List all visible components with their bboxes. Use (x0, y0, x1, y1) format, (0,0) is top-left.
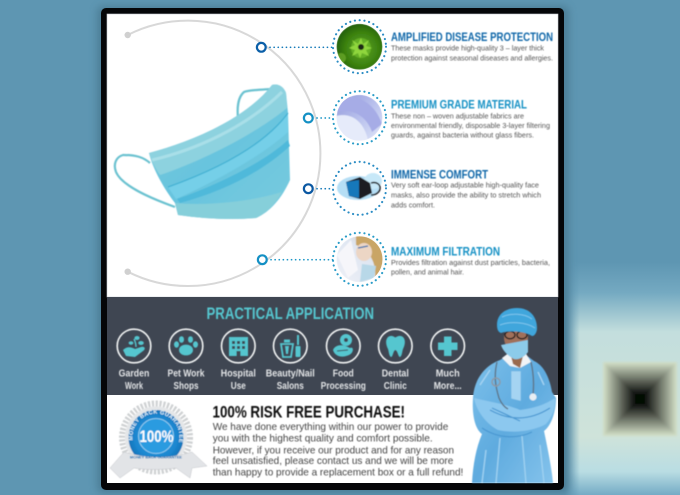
feature heading: premium grade material: PREMIUM GRADE MATERIAL (391, 97, 527, 111)
top white panel (107, 14, 558, 297)
feature icon: laboratory worker (333, 233, 386, 286)
left ear loop (115, 155, 175, 207)
bottom white panel (107, 395, 558, 483)
node: disease protection (257, 43, 333, 52)
guarantee text: We have done everything within our power to provide (213, 422, 449, 433)
feature text: immense comfort (391, 183, 541, 209)
application: pet work shops (168, 329, 205, 392)
guarantee text: than happy to provide a replacement box or a full refund! (213, 467, 463, 478)
feature text: amplified disease protection: These masks provide high-quality 3 – layer thick (391, 46, 545, 53)
application: garden work: Garden (119, 368, 149, 380)
feature icon: comfort mask (333, 162, 386, 215)
feature text: immense comfort: masks, also provide the ability to stretch which (391, 193, 541, 200)
card frame (101, 8, 564, 490)
stethoscope (495, 362, 534, 409)
feature text: premium grade material: guards, against bacteria without glass fibers. (391, 133, 534, 140)
application: garden work (117, 329, 151, 392)
guarantee text: feel unsatisfied, please contact us and we will be more (213, 456, 454, 467)
badge arc text: MONEY BACK GUARANTEE (128, 410, 184, 443)
heading: practical application: PRACTICAL APPLICATION (206, 304, 374, 323)
glasses (505, 331, 527, 339)
pleat one (168, 113, 288, 199)
feature text: amplified disease protection: protection against seasonal diseases and allergies. (391, 56, 553, 63)
application: hospital use: Use (231, 380, 246, 392)
application: dental clinic: Clinic (384, 380, 407, 392)
application: hospital use (221, 329, 256, 392)
feature icon: virus (333, 20, 386, 73)
mask body (149, 84, 290, 219)
face (504, 325, 528, 351)
crossed arms (474, 398, 555, 432)
feature heading: maximum filtration: MAXIMUM FILTRATION (391, 244, 500, 258)
feature text: maximum filtration: pollen, and animal hair. (391, 270, 464, 277)
application: pet work shops: Pet Work (168, 368, 205, 380)
face mask (501, 340, 528, 359)
arc connecting features (124, 21, 320, 286)
application: food processing: Food (333, 368, 354, 380)
right ear loop (238, 89, 272, 118)
feature text: amplified disease protection (391, 46, 553, 63)
neck (510, 352, 524, 368)
money back guarantee badge (110, 400, 208, 478)
bottom edge (175, 192, 282, 219)
dark application panel (107, 297, 558, 395)
application: dental clinic: Dental (382, 368, 409, 380)
feature text: premium grade material (391, 113, 550, 140)
application: garden work: Work (125, 380, 143, 392)
badge percentage: 100% (140, 427, 174, 446)
feature text: maximum filtration: Provides filtration against dust particles, bacteria, (391, 260, 550, 267)
application: beauty and nail salons: Beauty/Nail (266, 368, 315, 380)
node: comfort (304, 184, 333, 193)
application: hospital use: Hospital (221, 368, 256, 380)
guarantee text: you with the highest quality and comfort possible. (213, 434, 433, 445)
application: food processing (321, 329, 366, 392)
application: much more: Much (436, 368, 460, 380)
feature text: maximum filtration (391, 260, 550, 277)
application: beauty and nail salons (266, 329, 315, 392)
feature text: immense comfort: Very soft ear-loop adjustable high-quality face (391, 183, 539, 190)
guarantee text (213, 422, 463, 478)
surgical mask illustration (115, 84, 290, 219)
collar (502, 352, 531, 368)
node: premium material (304, 114, 333, 122)
feature text: immense comfort: adds comfort. (391, 202, 435, 209)
application: much more (431, 329, 465, 392)
application: pet work shops: Shops (174, 380, 199, 392)
guarantee text: However, if you receive our product and for any reason (213, 445, 454, 456)
guarantee heading: 100% RISK FREE PURCHASE! (212, 403, 405, 421)
pleat two (177, 140, 290, 203)
feature heading: immense comfort: IMMENSE COMFORT (391, 167, 488, 181)
cap (497, 308, 537, 336)
feature text: premium grade material: environmental friendly, disposable 3-layer filtering (391, 123, 550, 130)
node: filtration (258, 255, 333, 264)
ribbon text: MONEY BACK GUARANTEE (130, 454, 182, 460)
application: food processing: Processing (321, 380, 366, 392)
application: much more: More... (434, 380, 462, 392)
feature icon: fabric (333, 91, 386, 144)
application: dental clinic (378, 329, 412, 392)
decorative pyramid square (603, 362, 677, 436)
gown (472, 355, 556, 483)
doctor figure (472, 308, 556, 483)
feature heading: amplified disease protection: AMPLIFIED DISEASE PROTECTION (391, 30, 553, 44)
feature text: premium grade material: These non – woven adjustable fabrics are (391, 113, 524, 120)
card shadow (97, 6, 569, 493)
top band (149, 84, 287, 175)
ribbon (110, 452, 207, 478)
application: beauty and nail salons: Salons (277, 380, 304, 392)
